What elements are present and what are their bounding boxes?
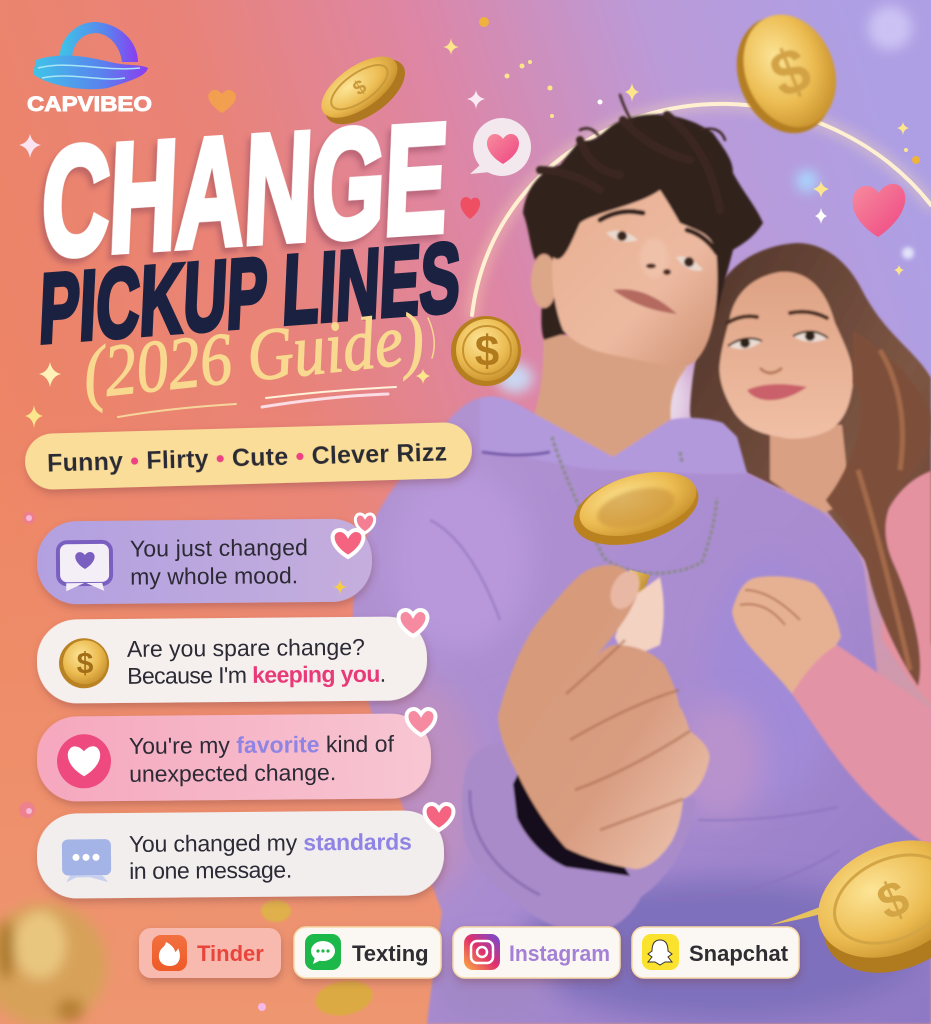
card 1 bbox=[37, 519, 372, 604]
icon: coin: $ bbox=[77, 647, 94, 680]
badge: Instagram: Instagram bbox=[509, 941, 610, 966]
quote text: in one message. bbox=[129, 857, 292, 884]
coin: bottom right: $ bbox=[869, 869, 917, 931]
card 4 heart bbox=[425, 804, 453, 830]
badge: Tinder bbox=[139, 928, 281, 978]
hoodie pocket and folds bbox=[430, 520, 840, 900]
raised finger behind bbox=[615, 577, 664, 660]
sleeve cuff bbox=[462, 743, 696, 935]
quote text: You're my favorite kind of bbox=[129, 731, 394, 759]
logo mark bbox=[33, 22, 148, 89]
quote text: Because I'm keeping you. bbox=[127, 661, 386, 689]
girl eyes bbox=[727, 312, 828, 349]
quote text: You just changed bbox=[130, 534, 308, 562]
girl hand bbox=[732, 576, 841, 694]
girl head and back hair bbox=[690, 243, 931, 686]
fist bbox=[498, 565, 710, 869]
hoodie body bbox=[340, 380, 931, 1024]
title: CHANGE: CHANGE bbox=[39, 90, 451, 289]
coin: middle with dollar bbox=[451, 316, 521, 386]
quote text: my whole mood. bbox=[130, 562, 298, 590]
badge: Snapchat bbox=[632, 927, 799, 978]
logo wordmark: CAPVIBEO bbox=[27, 93, 152, 116]
mouth bbox=[613, 289, 677, 314]
spinning coin on fingertip bbox=[566, 460, 706, 602]
girl lips bbox=[747, 384, 807, 400]
quote text: Are you spare change? bbox=[127, 634, 365, 662]
badge: Texting bbox=[294, 927, 441, 978]
icon: flame bbox=[152, 935, 187, 971]
card 2 bbox=[37, 616, 427, 704]
icon: heart badge bbox=[57, 734, 111, 789]
icon: chat heart bbox=[58, 542, 111, 591]
hair back bbox=[523, 114, 763, 340]
girl sleeve bbox=[792, 645, 931, 848]
tag pill bbox=[24, 422, 473, 490]
card 4 bbox=[37, 810, 444, 899]
hair strands over shoulder bbox=[826, 330, 931, 686]
necklace bbox=[552, 437, 717, 573]
glowing arc bbox=[472, 104, 931, 393]
coin: middle with dollar: $ bbox=[475, 327, 499, 376]
icon: chat bubble heart bbox=[470, 118, 531, 176]
coin: top centre: $ bbox=[349, 76, 371, 100]
dark inner cuff bbox=[513, 770, 630, 876]
coin: top right: $ bbox=[760, 32, 820, 112]
icon: message bbox=[305, 934, 341, 970]
quote text: unexpected change. bbox=[129, 759, 336, 787]
coin: top right bbox=[720, 1, 854, 148]
girl nose bbox=[760, 368, 782, 373]
title: Pickup Lines: PICKUP LINES bbox=[37, 221, 463, 364]
pointing hand bbox=[462, 565, 710, 935]
icon: message dots bbox=[62, 839, 111, 883]
coin: blurred bottom left bbox=[0, 879, 131, 1024]
card 3 heart bbox=[407, 709, 435, 735]
subtitle: 2026 Guide: (2026 Guide) bbox=[79, 298, 428, 415]
heart: small under bubble bbox=[460, 197, 480, 219]
icon: ghost bbox=[642, 934, 679, 970]
sweater shoulder bbox=[880, 471, 931, 705]
logo: Capvibeo bbox=[27, 22, 152, 116]
coin: bottom right bbox=[770, 818, 931, 995]
badge: Tinder: Tinder bbox=[197, 941, 264, 966]
heart: big right bbox=[853, 184, 905, 237]
badge: Snapchat: Snapchat bbox=[689, 941, 789, 966]
hood collar bbox=[480, 396, 747, 474]
girl hair front, sweater and arm bbox=[732, 330, 931, 848]
boy bbox=[340, 95, 931, 1024]
heart: top small orange bbox=[208, 90, 236, 113]
icon: camera bbox=[464, 934, 500, 970]
coin: top centre bbox=[311, 42, 416, 137]
eyes and brows bbox=[600, 212, 717, 271]
card 3 bbox=[37, 713, 431, 802]
card 1 hearts bbox=[332, 514, 375, 596]
left ear bbox=[531, 254, 557, 308]
tag pill: Funny • Flirty • Cute • Clever Rizz bbox=[47, 438, 447, 478]
underline brush strokes bbox=[118, 318, 434, 417]
badge: Texting: Texting bbox=[352, 941, 429, 966]
icon: coin bbox=[59, 638, 109, 689]
badge: Instagram bbox=[453, 927, 620, 978]
nose bbox=[640, 238, 671, 278]
girl neck bbox=[770, 425, 850, 515]
finger creases bbox=[566, 640, 690, 830]
girl hair back bbox=[690, 243, 931, 686]
neck bbox=[533, 330, 687, 465]
girl face bbox=[719, 272, 853, 439]
hair strands bbox=[540, 95, 725, 210]
card 2 heart bbox=[399, 610, 427, 636]
quote text: You changed my standards bbox=[129, 828, 412, 857]
small blurred coins bbox=[261, 900, 376, 1020]
face bbox=[552, 190, 717, 367]
